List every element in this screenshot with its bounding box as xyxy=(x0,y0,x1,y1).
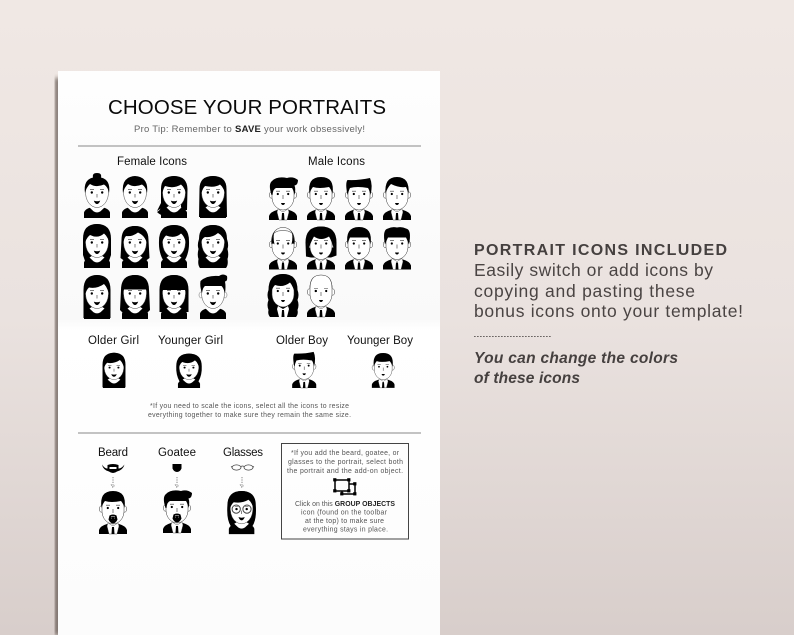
heading: female icons: Female Icons xyxy=(117,156,187,168)
icon: younger girl xyxy=(176,354,202,388)
side heading: PORTRAIT ICONS INCLUDED xyxy=(474,242,727,259)
callout: group objects instructions: at the top) to make sure xyxy=(305,518,384,525)
icon: younger boy xyxy=(372,353,395,388)
subtitle: Pro Tip: Remember to SAVE your work obsessively! xyxy=(134,124,365,135)
callout: group objects instructions: glasses to the portrait, select both xyxy=(288,459,403,466)
side note: of these icons xyxy=(474,370,580,387)
icon: older boy xyxy=(292,352,316,388)
side note xyxy=(474,350,678,387)
add-on: glasses: Glasses xyxy=(223,447,263,459)
icon: group objects xyxy=(334,478,356,495)
label: younger boy: Younger Boy xyxy=(347,335,413,347)
add-on: goatee xyxy=(158,447,196,533)
callout: group objects instructions: icon (found on the toolbar xyxy=(301,510,388,516)
callout: group objects instructions: everything stays in place. xyxy=(303,526,388,534)
label: older boy: Older Boy xyxy=(276,335,328,347)
side description: copying and pasting these xyxy=(474,281,695,301)
icon grid: female portraits xyxy=(83,173,228,319)
callout: group objects instructions xyxy=(282,444,408,539)
title: CHOOSE YOUR PORTRAITS xyxy=(108,96,386,119)
heading: male icons: Male Icons xyxy=(308,156,365,168)
side note: You can change the colors xyxy=(474,350,678,367)
icon: older girl xyxy=(103,353,125,388)
callout: group objects instructions: Click on this GROUP OBJECTS xyxy=(295,501,395,508)
label: younger girl: Younger Girl xyxy=(158,335,223,347)
add-on: beard xyxy=(98,447,128,534)
add-on: beard: Beard xyxy=(98,447,128,459)
add-on: glasses xyxy=(223,447,263,534)
callout: group objects instructions: the portrait and the add-on object. xyxy=(287,468,403,475)
note: scaling icons xyxy=(148,403,351,419)
add-on: goatee: Goatee xyxy=(158,447,196,459)
side description xyxy=(474,260,743,321)
icon grid: male portraits xyxy=(268,177,411,317)
callout: group objects instructions: *If you add the beard, goatee, or xyxy=(291,450,400,457)
note: scaling icons: everything together to make sure they remain the same size. xyxy=(148,412,351,419)
panel: printed sheet xyxy=(55,71,440,635)
label: older girl: Older Girl xyxy=(88,335,139,347)
side description: Easily switch or add icons by xyxy=(474,260,713,280)
side description: bonus icons onto your template! xyxy=(474,301,743,321)
note: scaling icons: *If you need to scale the icons, select all the icons to resize xyxy=(150,403,349,410)
